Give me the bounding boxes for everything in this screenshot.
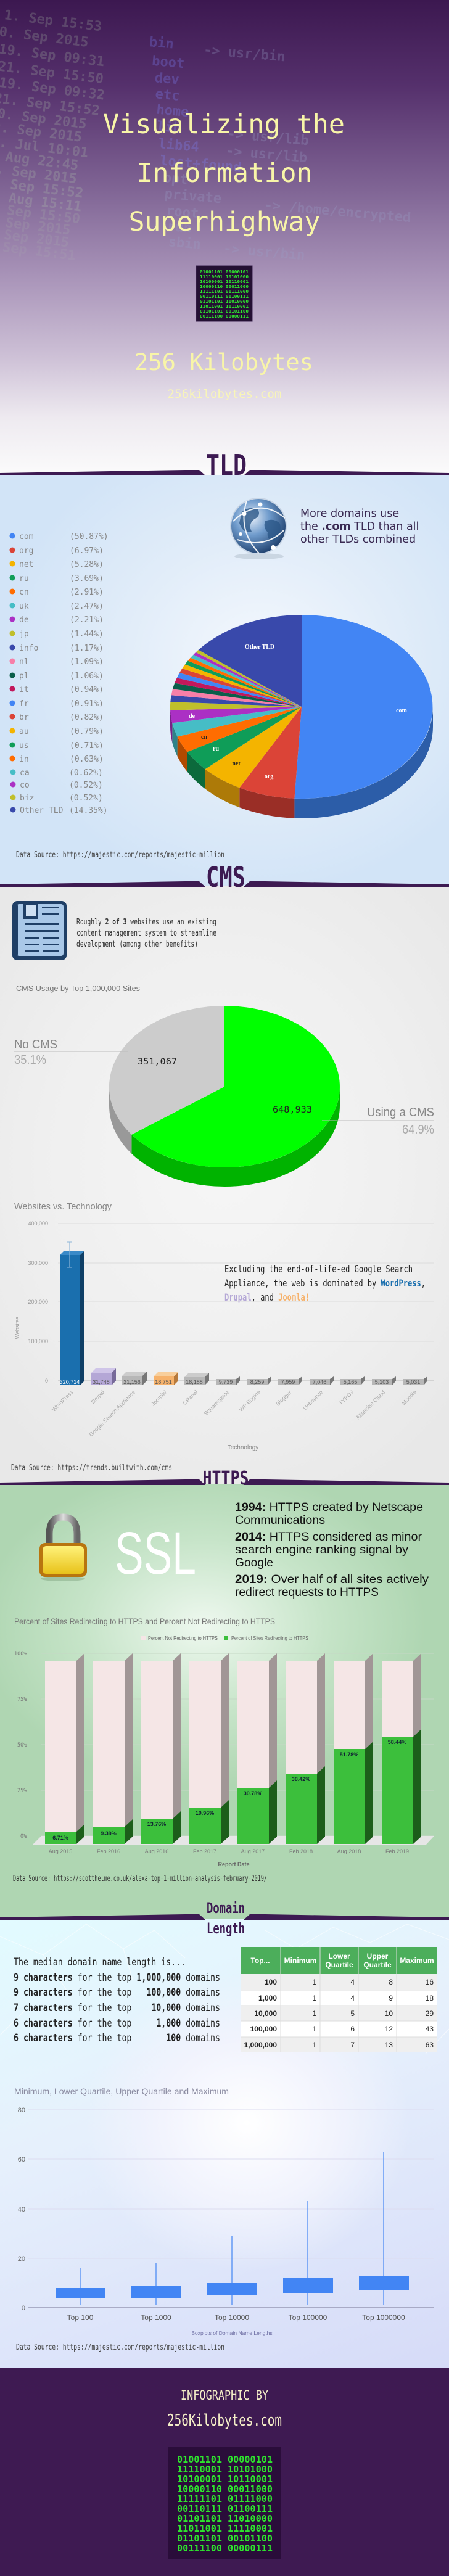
callout: WordPress dominates: Appliance, the web is dominated by WordPress,	[224, 1277, 426, 1289]
chart: technology bar chart: 100,000	[28, 1338, 48, 1344]
legend: HTTPS chart: Percent of Sites Redirecting to HTTPS	[231, 1635, 308, 1641]
table: domain length quartiles: 29	[426, 2009, 434, 2018]
header background path text: root	[165, 204, 199, 221]
chart title: box plot: Minimum, Lower Quartile, Upper Quartile and Maximum	[14, 2086, 229, 2096]
legend: TLD list: (1.17%)	[70, 644, 104, 653]
legend: TLD list: (1.06%)	[70, 672, 104, 681]
chart: CMS 3D pie: 648,933	[273, 1105, 312, 1115]
chart: technology bar chart: Atlassian Cloud	[355, 1389, 386, 1421]
icon: binary logo small: 01001101 00000101	[200, 269, 249, 274]
table: domain length quartiles: 1	[312, 2041, 316, 2049]
icon: binary logo footer: 01101101 11010000	[177, 2513, 273, 2524]
label: No CMS: 35.1%	[14, 1053, 46, 1067]
label: No CMS: No CMS	[14, 1038, 57, 1051]
chart: HTTPS stacked 3D bars: 6.71%	[52, 1835, 68, 1841]
chart: TLD 3D pie: ru	[213, 746, 219, 752]
chart: technology bar chart: Websites	[14, 1316, 20, 1339]
table: domain length quartiles: 1	[312, 2025, 316, 2033]
legend: TLD list: br	[19, 713, 29, 722]
table: domain length quartiles: 9	[389, 1994, 393, 2002]
header background path text: bin	[149, 35, 175, 52]
chart: TLD 3D pie	[170, 615, 433, 818]
callout: WordPress dominates: Drupal, and Joomla!	[224, 1291, 310, 1303]
icon: binary logo footer: 10000110 00011000	[177, 2483, 273, 2495]
heading: CMS: CMS	[206, 861, 245, 894]
legend: TLD list: us	[19, 741, 29, 751]
chart: technology bar chart	[14, 1220, 434, 1451]
chart: technology bar chart: Squarespace	[203, 1389, 230, 1417]
chart: technology bar chart: 320,714	[60, 1379, 80, 1385]
chart: TLD 3D pie: Other TLD	[245, 644, 274, 651]
text: median domain length: The median domain name length is...	[14, 1956, 186, 1969]
callout: .com text: the .com TLD than all	[300, 521, 419, 533]
header background code text: 21. Sep 15:50	[0, 59, 104, 87]
legend: TLD list: it	[19, 685, 29, 694]
header background path text: lib64	[158, 136, 200, 155]
chart title: HTTPS redirect: Percent of Sites Redirecting to HTTPS and Percent Not Redirecting to HTTPS	[14, 1616, 275, 1626]
text: median domain length: 9 characters for the top 100,000 domains	[14, 1986, 220, 1999]
chart: technology bar chart: WordPress	[51, 1389, 75, 1413]
chart: HTTPS stacked 3D bars: 25%	[17, 1788, 27, 1794]
legend: TLD list: (50.87%)	[70, 532, 109, 541]
icon: binary logo small	[196, 266, 252, 321]
footer: credit	[167, 2388, 282, 2430]
heading: HTTPS: HTTPS	[202, 1468, 249, 1489]
header background	[0, 0, 449, 475]
chart: domain length box plots: Boxplots of Domain Name Lengths	[191, 2330, 273, 2336]
chart: domain length box plots: 40	[18, 2206, 25, 2213]
header background code text	[0, 7, 113, 265]
chart: HTTPS stacked 3D bars: Report Date	[218, 1861, 250, 1867]
chart: domain length box plots: Top 100000	[289, 2313, 327, 2322]
icon: binary logo small: 01101101 00101100	[200, 308, 249, 314]
subtitle: 256 Kilobytes: 256 Kilobytes	[134, 349, 313, 376]
text: SSL: SSL	[115, 1520, 196, 1587]
chart: TLD 3D pie: com	[396, 707, 408, 714]
table: domain length quartiles: 16	[426, 1978, 434, 1986]
label: No CMS	[14, 1038, 128, 1067]
text: HTTPS timeline: redirect requests to HTTPS	[235, 1586, 379, 1599]
label: Using a CMS: Using a CMS	[367, 1106, 434, 1119]
chart: HTTPS stacked 3D bars: 75%	[17, 1697, 27, 1703]
legend: TLD list: co	[20, 781, 30, 790]
chart: technology bar chart: 18,188	[186, 1379, 203, 1385]
heading: TLD	[0, 448, 449, 482]
chart: CMS 3D pie	[109, 1006, 340, 1187]
legend: TLD list: ru	[19, 574, 29, 583]
header background path text: sbin	[168, 234, 202, 253]
legend: TLD list: jp	[19, 630, 29, 639]
chart: technology bar chart: Google Search Appliance	[88, 1389, 136, 1438]
legend: TLD list: pl	[19, 672, 29, 681]
background network lines: domain	[0, 1924, 449, 2054]
legend: TLD list: ca	[20, 768, 30, 778]
icon: binary logo footer: 11111101 01111000	[177, 2493, 273, 2504]
chart: domain length box plots: Top 1000	[141, 2313, 171, 2322]
table: domain length quartiles	[241, 1947, 437, 2052]
chart: technology bar chart: Technology	[228, 1444, 258, 1451]
chart: technology bar chart: 18,751	[155, 1379, 172, 1385]
text: HTTPS timeline: Google	[235, 1557, 273, 1570]
legend: TLD list: (3.69%)	[70, 574, 104, 583]
header background path text: -> /home/encrypted	[264, 197, 411, 226]
icon: document	[12, 901, 67, 960]
icon: padlock	[39, 1517, 87, 1581]
chart: technology bar chart: Blogger	[274, 1389, 292, 1407]
header background path text: -> usr/bin	[203, 43, 286, 65]
legend: TLD list: com	[19, 532, 34, 541]
icon: binary logo small: 10000110 00011000	[200, 284, 249, 289]
legend: TLD list: uk	[19, 602, 29, 611]
chart: TLD 3D pie: cn	[201, 734, 207, 741]
chart: domain length box plots: 20	[18, 2255, 25, 2263]
chart: technology bar chart: Joomla!	[150, 1389, 168, 1407]
chart: HTTPS stacked 3D bars	[14, 1651, 434, 1867]
header background path text: -> usr/lib	[226, 126, 310, 149]
heading: Domain Length: Domain	[207, 1899, 245, 1917]
table: domain length quartiles: 12	[385, 2025, 393, 2033]
legend: TLD list: (5.28%)	[70, 560, 104, 569]
text: CMS intro: development (among other benefits)	[76, 940, 198, 949]
chart: HTTPS stacked 3D bars: 13.76%	[147, 1821, 166, 1827]
heading: HTTPS	[0, 1468, 449, 1489]
chart: technology bar chart: 200,000	[28, 1299, 48, 1305]
footer: credit: INFOGRAPHIC BY	[181, 2388, 268, 2403]
table: domain length quartiles: Lower	[328, 1952, 350, 1961]
chart: HTTPS stacked 3D bars: Aug 2015	[49, 1848, 72, 1854]
text: median domain length	[14, 1956, 220, 2044]
legend: TLD list: info	[19, 644, 38, 653]
title: Superhighway	[129, 207, 320, 237]
header background path text: opt	[163, 170, 189, 187]
icon: binary logo footer: 01001101 00000101	[177, 2454, 273, 2465]
table: domain length quartiles: Top...	[250, 1956, 270, 1965]
table: domain length quartiles: Quartile	[363, 1961, 392, 1969]
chart title: websites vs technology: Websites vs. Technology	[14, 1201, 112, 1212]
icon: binary logo footer: 10100001 10110001	[177, 2474, 273, 2485]
legend: TLD list: fr	[19, 699, 29, 709]
chart: technology bar chart: 8,259	[250, 1379, 264, 1385]
icon: binary logo small: 01101101 11010000	[200, 298, 249, 304]
heading: Domain Length	[0, 1899, 449, 1937]
legend: TLD list: (2.47%)	[70, 602, 104, 611]
table: domain length quartiles: Minimum	[284, 1956, 316, 1965]
legend: TLD list: Other TLD	[20, 806, 64, 815]
text: HTTPS timeline	[235, 1501, 429, 1599]
text: median domain length: 6 characters for the top 100 domains	[14, 2032, 220, 2044]
HTTPS background	[0, 1484, 449, 1919]
header background path text: boot	[151, 54, 185, 72]
callout: .com text: other TLDs combined	[300, 533, 416, 546]
callout: .com text	[300, 508, 419, 546]
data source: TLD: Data Source: https://majestic.com/reports/majestic-million	[16, 850, 224, 860]
chart: technology bar chart: 400,000	[28, 1220, 48, 1227]
header background path text: lib	[156, 119, 182, 136]
label: Using a CMS	[322, 1106, 434, 1137]
header background path text: -> usr/lib	[225, 144, 308, 166]
chart: TLD 3D pie: org	[265, 773, 273, 780]
header background path text: home	[155, 102, 189, 120]
table: domain length quartiles: 10,000	[254, 2009, 277, 2018]
legend: HTTPS chart: Percent Not Redirecting to HTTPS	[148, 1635, 218, 1641]
header background path text: lost+found	[159, 153, 242, 176]
table: domain length quartiles: 4	[350, 1978, 355, 1986]
chart: HTTPS stacked 3D bars: Feb 2018	[289, 1848, 313, 1854]
legend: TLD list: au	[19, 727, 29, 736]
icon: binary logo small: 00110111 01100111	[200, 294, 249, 299]
chart: HTTPS stacked 3D bars: 50%	[17, 1742, 27, 1748]
chart: HTTPS stacked 3D bars: 30.78%	[244, 1790, 262, 1796]
header background code text: 1. Sep 15:53	[4, 7, 102, 35]
legend: TLD list: (0.52%)	[69, 781, 103, 790]
legend: TLD list: (0.52%)	[69, 794, 103, 803]
table: domain length quartiles: 1,000	[258, 1994, 277, 2002]
table: domain length quartiles: 1	[312, 2009, 316, 2018]
heading: TLD: TLD	[206, 448, 247, 482]
chart: technology bar chart: Drupal	[90, 1389, 105, 1405]
chart: technology bar chart: WP Engine	[238, 1389, 262, 1413]
text: CMS intro: Roughly 2 of 3 websites use an existing	[76, 918, 216, 927]
legend: TLD list: (2.91%)	[70, 588, 104, 597]
table: domain length quartiles: 5	[350, 2009, 355, 2018]
chart: domain length box plots: 60	[18, 2156, 25, 2163]
header background path text: run	[167, 219, 192, 236]
Domain background	[0, 1919, 449, 2368]
chart title: CMS usage: CMS Usage by Top 1,000,000 Sites	[16, 984, 140, 993]
legend: TLD list: in	[19, 755, 29, 764]
chart: HTTPS stacked 3D bars: Aug 2016	[145, 1848, 168, 1854]
legend: TLD list: (0.94%)	[70, 685, 104, 694]
text: median domain length: 7 characters for the top 10,000 domains	[14, 2002, 220, 2014]
chart: technology bar chart: TYPO3	[337, 1389, 355, 1406]
label: Using a CMS: 64.9%	[402, 1123, 434, 1137]
text: CMS intro: content management system to streamline	[76, 929, 216, 938]
chart: technology bar chart: Moodle	[400, 1389, 418, 1406]
text: HTTPS timeline: 2019: Over half of all sites actively	[235, 1573, 429, 1586]
table: domain length quartiles: 100,000	[250, 2025, 277, 2033]
table: domain length quartiles: 8	[389, 1978, 393, 1986]
table: domain length quartiles: 18	[426, 1994, 434, 2002]
chart: technology bar chart: 21,156	[123, 1379, 141, 1385]
legend: TLD list: (1.09%)	[70, 657, 104, 667]
chart: HTTPS stacked 3D bars: 9.39%	[101, 1830, 117, 1837]
title: Information	[137, 158, 312, 189]
table: domain length quartiles: 13	[385, 2041, 393, 2049]
title: Visualizing the	[103, 109, 345, 140]
icon: binary logo small: 11111101 01111000	[200, 289, 249, 294]
legend: TLD list: (0.62%)	[69, 768, 103, 778]
chart: domain length box plots: Top 100	[67, 2313, 94, 2322]
text: CMS intro	[76, 918, 216, 949]
legend: HTTPS chart	[141, 1635, 308, 1641]
chart: TLD 3D pie: net	[232, 760, 241, 767]
icon: globe	[231, 498, 286, 559]
heading: Domain Length: Length	[207, 1920, 245, 1937]
legend: TLD list: nl	[19, 657, 29, 667]
icon: binary logo footer: 00111100 00000111	[177, 2543, 273, 2554]
legend: TLD list: (6.97%)	[70, 546, 104, 556]
chart: HTTPS stacked 3D bars: Feb 2017	[193, 1848, 216, 1854]
header background code text: 19. Sep 09:31	[0, 41, 105, 70]
table: domain length quartiles: 63	[426, 2041, 434, 2049]
header background path text: etc	[155, 86, 180, 104]
legend: TLD list: biz	[20, 794, 34, 803]
chart: domain length box plots: Top 10000	[215, 2313, 249, 2322]
header background path text: -> usr/bin	[223, 241, 305, 263]
chart: domain length box plots: 0	[22, 2305, 25, 2312]
title	[103, 109, 345, 237]
table: domain length quartiles: Maximum	[400, 1956, 434, 1965]
table: domain length quartiles: 6	[350, 2025, 355, 2033]
text: median domain length: 6 characters for the top 1,000 domains	[14, 2017, 220, 2030]
legend: TLD list: cn	[19, 588, 29, 597]
legend: TLD list: (1.44%)	[70, 630, 104, 639]
icon: binary logo small: 11110001 10101000	[200, 274, 249, 279]
chart: HTTPS stacked 3D bars: 100%	[14, 1651, 27, 1657]
chart: technology bar chart: 5,165	[344, 1379, 357, 1385]
table: domain length quartiles: 7	[350, 2041, 355, 2049]
subtitle: site url: 256kilobytes.com	[168, 387, 281, 401]
CMS background	[0, 886, 449, 1484]
header background code text: 19. Sep 09:32	[0, 75, 105, 104]
text: HTTPS timeline: 2014: HTTPS considered as minor	[235, 1531, 422, 1544]
header background path text: dev	[154, 70, 180, 88]
chart: HTTPS stacked 3D bars: Aug 2018	[337, 1848, 361, 1854]
table: domain length quartiles: 1	[312, 1978, 316, 1986]
footer background	[0, 2368, 449, 2576]
chart: technology bar chart: 9,739	[219, 1379, 233, 1385]
TLD background	[0, 475, 449, 886]
chart: HTTPS stacked 3D bars: Aug 2017	[241, 1848, 265, 1854]
legend: TLD list: (0.82%)	[70, 713, 104, 722]
chart: technology bar chart: 7,959	[281, 1379, 295, 1385]
table: domain length quartiles: 1	[312, 1994, 316, 2002]
chart: technology bar chart: 31,748	[93, 1379, 110, 1385]
chart: HTTPS stacked 3D bars: Feb 2019	[385, 1848, 409, 1854]
data source: HTTPS: Data Source: https://scotthelme.co.uk/alexa-top-1-million-analysis-february-2019/	[13, 1874, 267, 1883]
text: HTTPS timeline: Communications	[235, 1514, 325, 1527]
callout: WordPress dominates	[224, 1263, 426, 1303]
legend: TLD list	[10, 532, 109, 815]
icon: binary logo footer	[168, 2447, 281, 2559]
chart: CMS 3D pie: 351,067	[138, 1057, 177, 1067]
table: domain length quartiles: Quartile	[325, 1961, 353, 1969]
header background path text	[131, 35, 425, 273]
chart: technology bar chart: 300,000	[28, 1260, 48, 1266]
legend: TLD list: (2.21%)	[70, 615, 104, 625]
table: domain length quartiles: 10	[385, 2009, 393, 2018]
text: median domain length: 9 characters for the top 1,000,000 domains	[14, 1972, 220, 1984]
footer: credit: 256Kilobytes.com	[167, 2411, 282, 2430]
legend: TLD list: de	[19, 615, 29, 625]
chart: HTTPS stacked 3D bars: 38.42%	[292, 1776, 310, 1782]
legend: TLD list: (0.71%)	[70, 741, 104, 751]
icon: binary logo small: 10100001 10110001	[200, 279, 249, 284]
data source: domain length: Data Source: https://majestic.com/reports/majestic-million	[16, 2343, 224, 2352]
text: HTTPS timeline: search engine ranking signal by	[235, 1544, 409, 1557]
text: HTTPS timeline: 1994: HTTPS created by Netscape	[235, 1501, 423, 1514]
icon: binary logo footer: 01101101 00101100	[177, 2533, 273, 2544]
chart: domain length box plots: 80	[18, 2107, 25, 2114]
table: domain length quartiles: Upper	[367, 1952, 389, 1961]
icon: binary logo small: 11011001 11110001	[200, 303, 249, 309]
chart: domain length box plots: Top 1000000	[362, 2313, 405, 2322]
header background path text: private	[164, 186, 222, 207]
legend: TLD list: (14.35%)	[69, 806, 108, 815]
chart: domain length box plots	[18, 2107, 434, 2336]
legend: TLD list: (0.63%)	[70, 755, 104, 764]
chart: HTTPS stacked 3D bars: 58.44%	[388, 1739, 406, 1745]
table: domain length quartiles: 100	[265, 1978, 277, 1986]
callout: .com text: More domains use	[300, 508, 399, 520]
icon: binary logo footer: 11110001 10101000	[177, 2464, 273, 2475]
chart: TLD 3D pie: de	[189, 713, 196, 720]
chart: HTTPS stacked 3D bars: 51.78%	[340, 1751, 358, 1758]
data source: CMS: Data Source: https://trends.builtwith.com/cms	[11, 1463, 172, 1473]
table: domain length quartiles: 1,000,000	[244, 2041, 277, 2049]
icon: binary logo footer: 00110111 01100111	[177, 2503, 273, 2514]
chart: HTTPS stacked 3D bars: 19.96%	[196, 1810, 214, 1816]
legend: TLD list: (0.91%)	[70, 699, 104, 709]
chart: technology bar chart: CPanel	[181, 1389, 199, 1406]
table: domain length quartiles: 4	[350, 1994, 355, 2002]
chart: technology bar chart: Unbounce	[302, 1389, 324, 1411]
chart: technology bar chart: 0	[45, 1378, 48, 1384]
legend: TLD list: (0.79%)	[70, 727, 104, 736]
icon: binary logo footer: 11011001 11110001	[177, 2523, 273, 2534]
heading: CMS	[0, 861, 449, 894]
header background code text: 0. Sep 2015	[0, 24, 89, 51]
chart: HTTPS stacked 3D bars: Feb 2016	[97, 1848, 120, 1854]
legend: TLD list: net	[19, 560, 33, 569]
icon: binary logo small: 00111100 00000111	[200, 313, 249, 319]
table: domain length quartiles: 43	[426, 2025, 434, 2033]
chart: technology bar chart: 5,103	[375, 1379, 389, 1385]
chart: technology bar chart: 7,046	[313, 1379, 326, 1385]
legend: TLD list: org	[19, 546, 33, 556]
chart: HTTPS stacked 3D bars: 0%	[20, 1833, 27, 1840]
chart: technology bar chart: 5,031	[406, 1379, 420, 1385]
